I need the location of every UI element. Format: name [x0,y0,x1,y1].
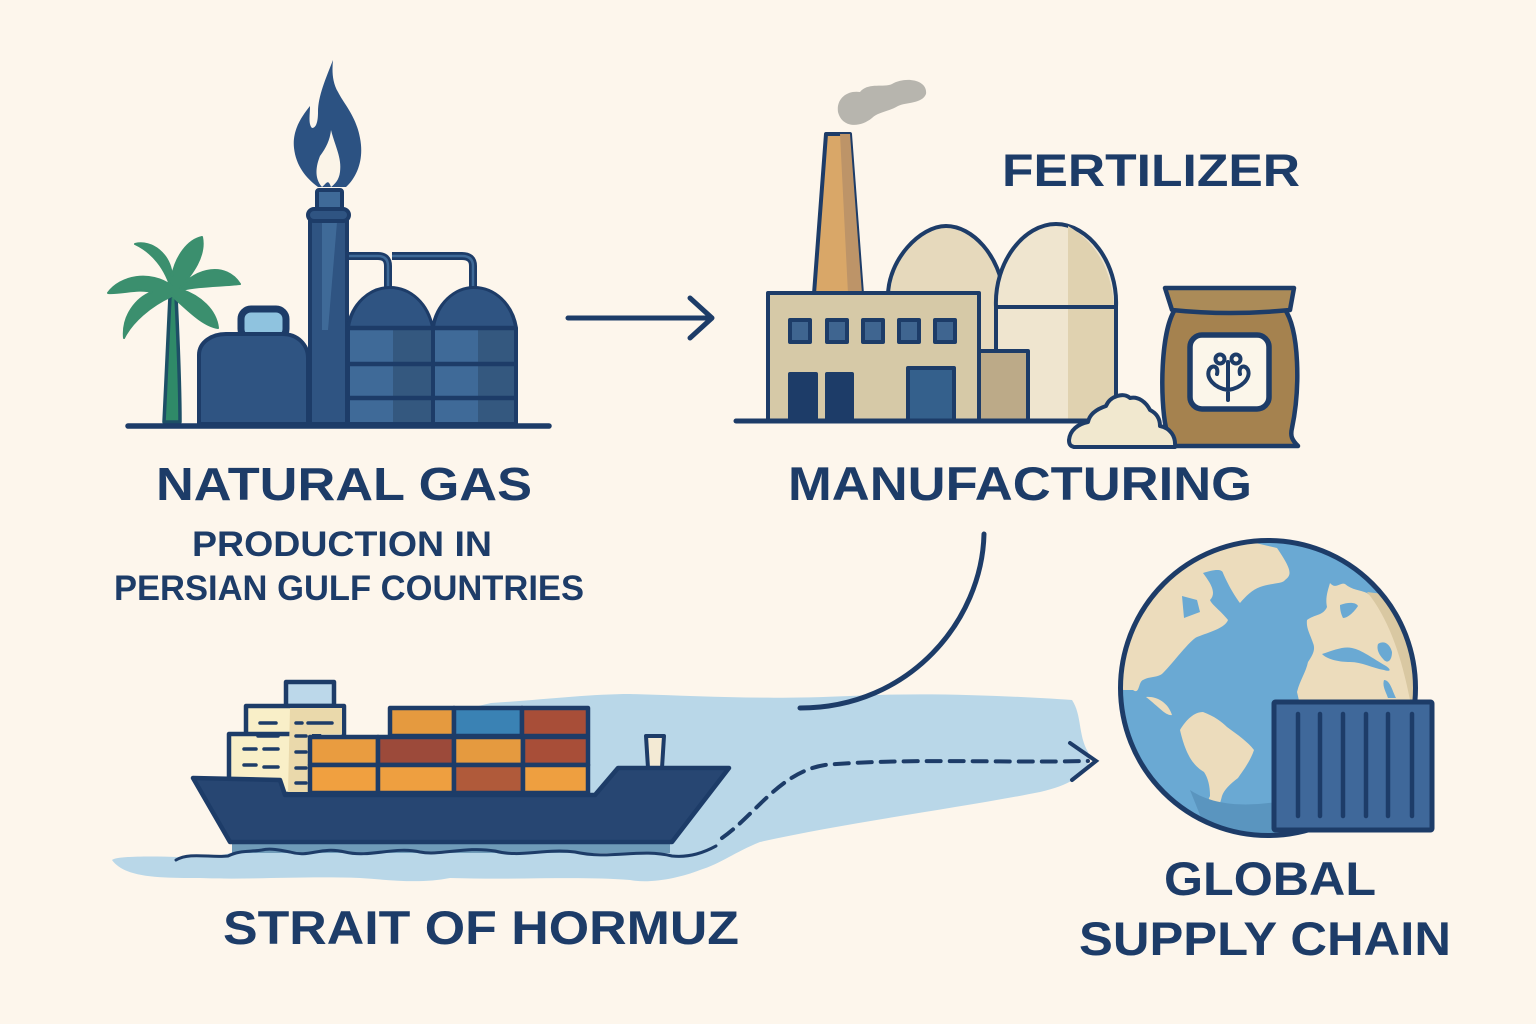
icon: natural gas plant [108,60,549,426]
waterline [176,846,716,860]
icon: plant symbol [1208,354,1249,400]
icon: flare stack [308,190,349,424]
text: production in: PRODUCTION IN [192,525,492,564]
icon: flame [294,60,361,187]
icon: pipes [347,256,473,290]
icon: silos [888,224,1116,421]
superstructure [229,682,344,794]
heading: supply chain: SUPPLY CHAIN [1079,912,1451,965]
globe [1110,530,1430,840]
arrow: gas to manufacturing [568,298,712,338]
icon: main building [768,293,979,421]
icon: fertilizer bag [1162,288,1298,446]
ground line [128,423,549,429]
icon: globe and container [1110,530,1432,840]
funnel [646,736,664,768]
icon: tank small [199,309,308,424]
icon: large tanks [348,288,516,424]
arrow: manufacturing to strait [800,534,984,708]
icon: fertilizer pile [1069,395,1175,447]
heading: manufacturing: MANUFACTURING [788,457,1252,510]
heading: strait of hormuz: STRAIT OF HORMUZ [223,901,739,954]
icon: fertilizer factory [736,80,1298,447]
heading: fertilizer: FERTILIZER [1002,145,1300,196]
icon: smoke [838,80,926,125]
icon: chimney [814,134,862,294]
water: strait [112,694,1089,881]
hull [193,768,729,842]
shipping container [1274,702,1432,830]
icon: palm tree [108,237,240,422]
heading: natural gas: NATURAL GAS [156,458,532,510]
text: persian gulf countries: PERSIAN GULF COUNTRIES [114,569,584,608]
icon: cargo ship [193,682,729,853]
containers [310,708,588,793]
arrow: dashed route [722,743,1096,838]
ground line [736,418,1120,424]
icon: side building [978,351,1028,421]
heading: global: GLOBAL [1164,852,1376,905]
under-waterline hull [232,842,670,853]
